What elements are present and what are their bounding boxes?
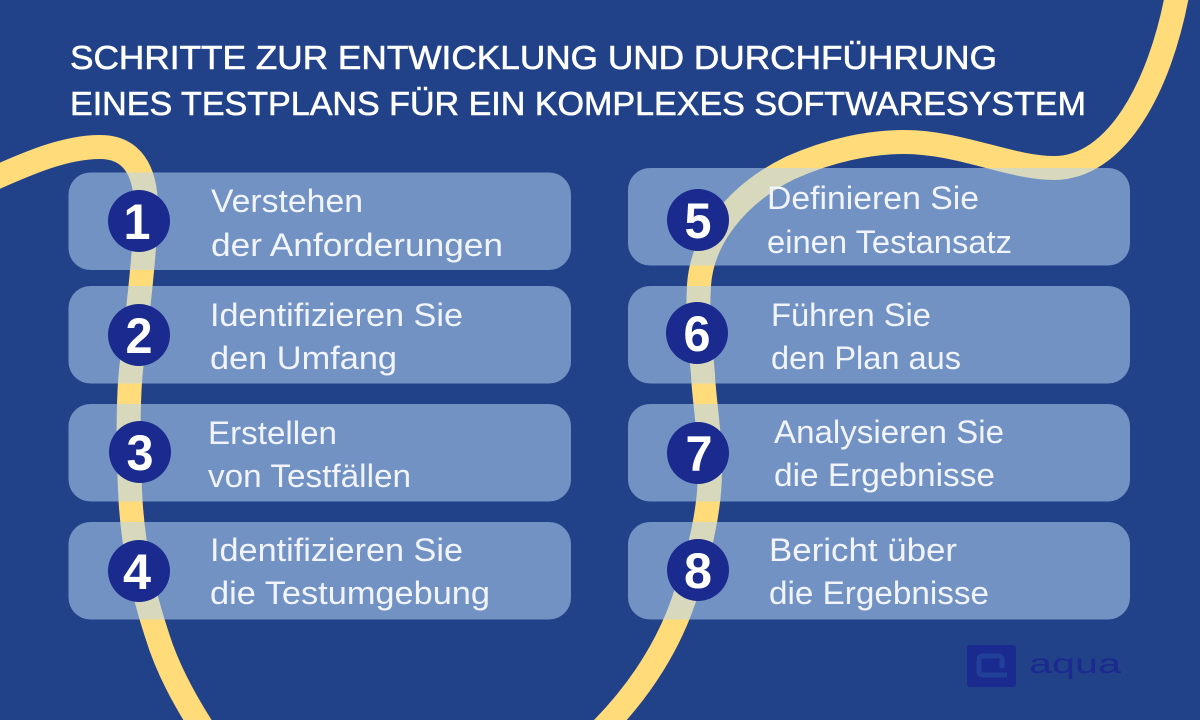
step 4: Identifizieren Sie (210, 532, 463, 568)
title: SCHRITTE ZUR ENTWICKLUNG UND DURCHFÜHRUNG (70, 39, 997, 76)
logo: aqua (967, 645, 1122, 687)
step 1: 1 (124, 194, 150, 250)
step 3 (68, 404, 571, 502)
logo: aqua: aqua (1029, 648, 1122, 679)
step 8: 8 (684, 543, 712, 599)
step 5: Definieren Sie (767, 180, 979, 216)
step 3: 3 (126, 425, 154, 481)
step 2: Identifizieren Sie (210, 297, 463, 333)
step 5: 5 (684, 193, 712, 249)
step 4 (68, 522, 571, 620)
step 2 (68, 286, 571, 384)
step 6: 6 (684, 306, 710, 362)
step 3: von Testfällen (208, 458, 411, 494)
step 1 (68, 172, 571, 270)
step 6: den Plan aus (771, 340, 961, 376)
step 8 (628, 522, 1130, 620)
step 3: Erstellen (208, 415, 337, 451)
step 6 (628, 286, 1130, 384)
step 8: die Ergebnisse (769, 575, 989, 611)
step 7 (628, 404, 1130, 502)
decorative curve: left (0, 147, 207, 720)
step 1: Verstehen (211, 183, 363, 219)
step 4: 4 (123, 544, 151, 600)
title (70, 39, 1086, 122)
step 2: den Umfang (210, 340, 397, 376)
step 7: 7 (686, 426, 712, 482)
step 7: Analysieren Sie (774, 414, 1004, 450)
step 7: die Ergebnisse (774, 457, 995, 493)
step 2: 2 (126, 308, 152, 364)
step 1: der Anforderungen (211, 227, 503, 263)
decorative curve: right (596, 0, 1178, 720)
step 5: einen Testansatz (767, 224, 1012, 260)
step 8: Bericht über (769, 532, 957, 568)
title: EINES TESTPLANS FÜR EIN KOMPLEXES SOFTWARESYSTEM (70, 85, 1086, 122)
step 5 (628, 168, 1130, 266)
step 4: die Testumgebung (210, 575, 490, 611)
step 6: Führen Sie (771, 297, 931, 333)
